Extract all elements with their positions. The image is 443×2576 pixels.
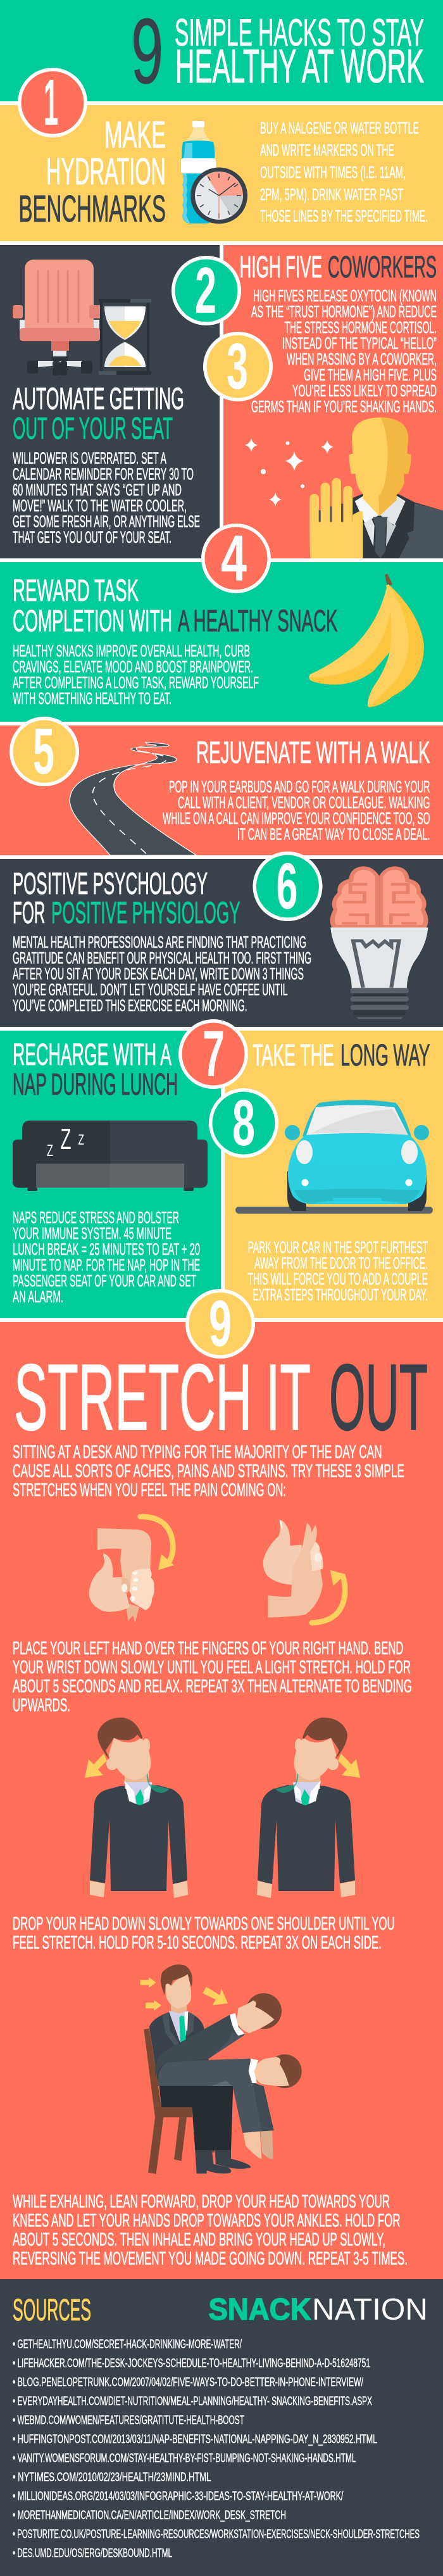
text: nap advice: NAPS REDUCE STRESS AND BOLSTER	[13, 1208, 179, 1227]
panel: hack 3 high five coworkers	[223, 245, 443, 558]
icon: sofa with z's	[13, 1121, 208, 1191]
heading: recharge with a nap during lunch: RECHARGE WITH A	[13, 1038, 172, 1072]
text: seat reminder advice: GET SOME FRESH AIR, OR ANYTHING ELSE	[13, 512, 200, 531]
illustration: man tilting head left	[85, 1718, 188, 1898]
logo: SnackNation	[209, 2293, 428, 2327]
list: source links	[13, 2337, 420, 2560]
heading: automate getting out of your seat	[13, 382, 184, 446]
heading: automate getting out of your seat: OUT OF YOUR SEAT	[13, 412, 173, 446]
icon: winding road	[70, 742, 196, 855]
panel: hack 7 recharge with a nap	[0, 1031, 221, 1318]
badge 5	[9, 715, 79, 788]
text: seat reminder advice: CALENDAR REMINDER FOR EVERY 30 TO	[13, 465, 194, 484]
text: seat reminder advice: WILLPOWER IS OVERRATED. SET A	[13, 449, 166, 468]
badge 1	[18, 66, 87, 139]
heading: recharge with a nap during lunch	[13, 1038, 178, 1102]
badge 4: 4	[221, 522, 247, 594]
panel: hack 6 positive psychology	[0, 850, 443, 1027]
badge 3	[203, 330, 273, 403]
heading: positive psychology for positive physiology: POSITIVE PSYCHOLOGY	[13, 867, 208, 901]
text: seat reminder advice: THAT GETS YOU OUT OF YOUR SEAT.	[13, 528, 172, 547]
text: nap advice: MINUTE TO NAP. FOR THE NAP, HOP IN THE	[13, 1255, 200, 1274]
heading: make hydration benchmarks: MAKE	[104, 114, 166, 156]
title	[175, 11, 424, 92]
text: nap advice: AN ALARM.	[13, 1287, 63, 1306]
list: source links: • MORETHANMEDICATION.CA/EN/ARTICLE/INDEX/WORK_DESK_STRETCH	[13, 2508, 286, 2522]
badge 8: 8	[232, 1086, 255, 1159]
icon: office chair	[13, 260, 101, 375]
heading: recharge with a nap during lunch: NAP DURING LUNCH	[13, 1068, 178, 1102]
panel: hack 9 stretch it out	[0, 1287, 443, 2279]
badge 9: 9	[209, 1287, 232, 1360]
logo: SnackNation: SNACK	[209, 2293, 311, 2327]
illustration: man tilting head right	[257, 1718, 360, 1898]
panel: sources footer	[0, 2279, 443, 2576]
heading: make hydration benchmarks: HYDRATION	[46, 151, 166, 192]
list: source links: • WEBMD.COM/WOMEN/FEATURES/GRATITUTE-HEALTH-BOOST	[13, 2413, 244, 2427]
heading: positive psychology for positive physiology	[13, 867, 240, 930]
badge 7	[178, 1017, 248, 1090]
text: snack advice	[13, 641, 259, 708]
heading: sources: SOURCES	[13, 2294, 91, 2327]
list: source links: • DES.UMD.EDU/OS/ERG/DESKBOUND.HTML	[13, 2546, 172, 2560]
text: neck stretch instructions	[13, 1914, 395, 1953]
text: seat reminder advice: MOVE!” WALK TO THE WATER COOLER,	[13, 496, 187, 515]
text: nap advice: YOUR IMMUNE SYSTEM. 45 MINUTE	[13, 1224, 172, 1243]
text: seat reminder advice: 60 MINUTES THAT SAYS “GET UP AND	[13, 481, 182, 499]
panel: hack 5 rejuvenate with a walk	[0, 715, 443, 855]
panel: header	[0, 0, 443, 103]
heading: reward task completion: COMPLETION WITH	[13, 605, 172, 638]
heading: reward task completion: REWARD TASK	[13, 574, 139, 608]
heading: high five coworkers: HIGH FIVE	[239, 251, 322, 284]
badge 8	[209, 1086, 278, 1159]
panel: hack 1 hydration benchmarks	[0, 66, 443, 241]
badge 3: 3	[227, 330, 248, 403]
text: high five advice	[251, 286, 437, 416]
badge 5: 5	[33, 715, 54, 788]
badge 6: 6	[276, 850, 297, 922]
text: wrist stretch instructions	[13, 1638, 412, 1716]
icon: hourglass	[99, 299, 151, 375]
text: stretch intro	[13, 1442, 404, 1500]
text: snack advice: WITH SOMETHING HEALTHY TO EAT.	[13, 689, 172, 708]
text: snack advice: CRAVINGS, ELEVATE MOOD AND BOOST BRAINPOWER.	[13, 657, 253, 676]
text: wrist stretch instructions: UPWARDS.	[13, 1695, 70, 1716]
badge 4	[201, 522, 271, 594]
text: gratitude advice	[13, 933, 311, 1015]
icon: car	[235, 1100, 433, 1214]
heading: positive psychology for positive physiology: POSITIVE PHYSIOLOGY	[51, 896, 240, 930]
illustration: man giving high five	[309, 417, 443, 558]
badge 6	[253, 850, 323, 922]
text: nap advice	[13, 1208, 200, 1306]
title number 9: 9	[131, 0, 163, 103]
text: hydration instructions	[260, 118, 428, 225]
heading: positive psychology for positive physiology: FOR	[13, 896, 45, 930]
badge 1: 1	[44, 66, 58, 139]
badge 7: 7	[203, 1017, 225, 1090]
icon: sofa with z's: Z	[78, 1131, 84, 1148]
icon: banana	[309, 574, 424, 707]
text: parking advice	[248, 1238, 428, 1304]
illustration: seated man leaning forward	[140, 1964, 302, 2174]
text: nap advice: PASSENGER SEAT OF YOUR CAR AND SET	[13, 1271, 196, 1290]
badge 2: 2	[195, 254, 216, 327]
illustration: wrist stretch up	[263, 1519, 346, 1623]
text: gratitude advice: YOU’VE COMPLETED THIS EXERCISE EACH MORNING.	[13, 996, 247, 1015]
badge 9	[185, 1287, 255, 1360]
icon: sofa with z's: Z	[61, 1122, 71, 1155]
heading: automate getting out of your seat: AUTOMATE GETTING	[13, 382, 184, 416]
text: walk advice	[163, 777, 430, 844]
logo: SnackNation: NATION	[312, 2293, 428, 2327]
panel: hack 4 healthy snack	[0, 522, 443, 722]
list: source links: • NYTIMES.COM/2010/02/23/HEALTH/23MIND.HTML	[13, 2470, 211, 2484]
panel: hack 2 automate getting out of your seat	[0, 245, 220, 558]
icon: clock	[190, 167, 247, 224]
badge 2	[172, 254, 241, 327]
text: nap advice: LUNCH BREAK = 25 MINUTES TO EAT + 20	[13, 1240, 200, 1259]
heading: make hydration benchmarks: BENCHMARKS	[19, 188, 166, 230]
heading: take the long way: TAKE THE	[253, 1039, 334, 1072]
text: snack advice: HEALTHY SNACKS IMPROVE OVERALL HEALTH, CURB	[13, 641, 250, 660]
icon: water bottle	[181, 121, 216, 223]
list: source links: • GETHEALTHYU.COM/SECRET-HACK-DRINKING-MORE-WATER/	[13, 2337, 242, 2351]
icon: brain light bulb	[330, 866, 428, 1019]
icon: sparkles	[245, 438, 334, 506]
heading: reward task completion	[13, 574, 338, 638]
panel: hack 8 take the long way	[225, 1031, 443, 1318]
illustration: wrist stretch down	[89, 1517, 174, 1623]
text: seat reminder advice	[13, 449, 200, 547]
icon: sofa with z's: Z	[47, 1141, 53, 1160]
text: forward bend instructions	[13, 2192, 408, 2269]
heading: make hydration benchmarks	[19, 114, 166, 230]
